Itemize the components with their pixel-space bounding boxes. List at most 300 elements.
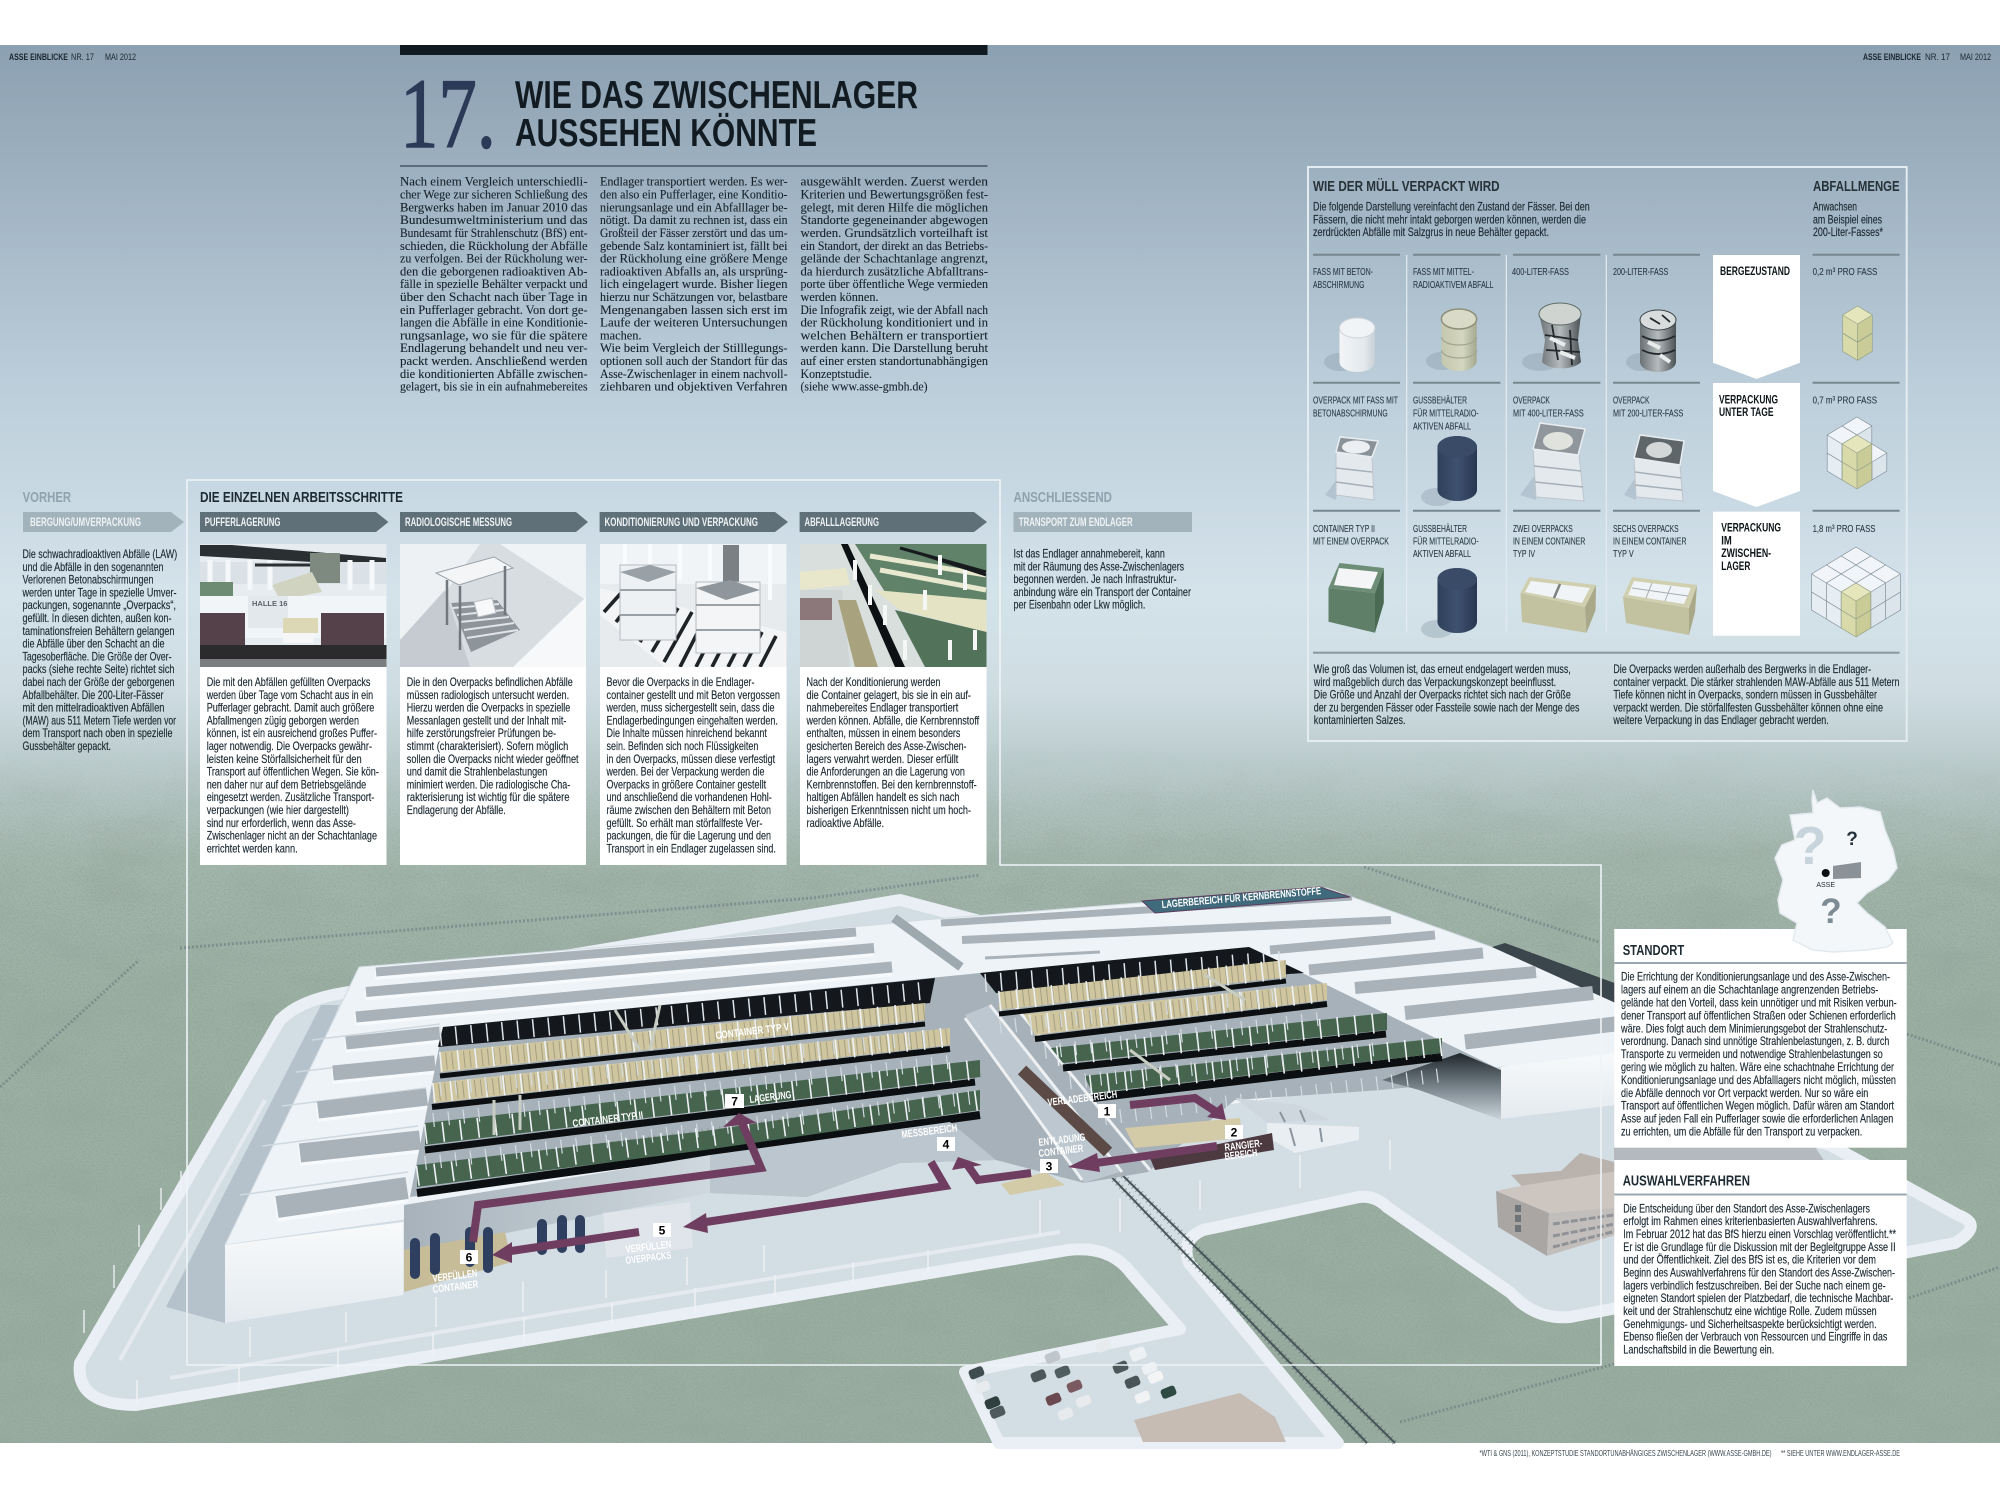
row labels verpackung unter tage: OVERPACK [1613, 396, 1650, 406]
icon: overpack with 200 litre drum [1624, 435, 1684, 501]
row labels bergezustand: 200-LITER-FASS [1613, 267, 1669, 278]
card text: Transport in ein Endlager zugelassen sind. [606, 842, 776, 855]
card text: Die Inhalte müssen hinreichend bekannt [606, 727, 768, 740]
area labels: LAGERUNG [749, 1089, 792, 1106]
grey strip left of building [166, 1005, 339, 1323]
icon: overpack with 400 litre drum [1520, 423, 1585, 501]
card text: Hierzu werden die Overpacks in spezielle [407, 702, 570, 715]
intro column 2: Wie beim Vergleich der Stilllegungs- [600, 341, 788, 355]
card text: Endlagerung der Abfälle. [407, 804, 506, 817]
intro text: Die folgende Darstellung vereinfacht den Zustand der Fässer. Bei den [1313, 200, 1590, 214]
card text: sind nur erforderlich, wenn das Asse- [207, 817, 356, 830]
front left wall [225, 1222, 404, 1323]
area labels: BEREICH [1224, 1147, 1258, 1163]
photo: hall with crane [200, 544, 386, 667]
train in tunnel [1022, 1070, 1108, 1152]
vorher text: mit den mittelradioaktiven Abfällen [22, 702, 164, 715]
chevron bergezustand: BERGEZUSTAND [1720, 266, 1790, 278]
heading: WIE DER MÜLL VERPACKT WIRD [1313, 178, 1500, 195]
auswahlverfahren text: erfolgt im Rahmen eines kriterienbasierten Auswahlverfahrens. [1623, 1215, 1878, 1228]
card text [407, 676, 579, 817]
card text: Messanlagen gestellt und der Inhalt mit- [407, 714, 566, 727]
floor slabs [417, 981, 1442, 1193]
intro text [400, 175, 989, 394]
footnotes: *WTI & GNS (2011), KONZEPTSTUDIE STANDORTUNABHÄNGIGES ZWISCHENLAGER (WWW.ASSE-GMBH.DE) [1480, 1448, 1772, 1458]
row labels bergezustand: 0,2 m³ PRO FASS [1813, 267, 1878, 278]
beige container rows [433, 960, 1327, 1103]
row labels zwischenlager: GUSSBEHÄLTER [1413, 523, 1467, 535]
intro column 3: (siehe www.asse-gmbh.de) [800, 380, 928, 394]
card text: bisherigen Erkenntnissen nicht um hoch- [806, 804, 971, 817]
number badges: 7 [731, 1094, 738, 1108]
row labels zwischenlager: IN EINEM CONTAINER [1613, 536, 1686, 548]
row labels zwischenlager [1313, 523, 1876, 560]
intro column 2: nierungsanlage und ein Abfalllager be- [600, 200, 788, 214]
auswahlverfahren text: Die Entscheidung über den Standort des Asse-Zwischenlagers [1623, 1202, 1870, 1215]
card text: eingesetzt werden. Zusätzliche Transport- [207, 791, 374, 804]
card text: können, ist ein ausreichend großes Puffer- [207, 727, 377, 740]
nuclear fuel storage tag [1142, 884, 1350, 913]
small facility [1833, 862, 1861, 879]
chevron verpackung unter tage [1713, 383, 1800, 507]
row labels verpackung unter tage: 0,7 m³ PRO FASS [1813, 396, 1877, 406]
vorher text: dabei nach der Größe der geborgenen [22, 676, 174, 689]
title: AUSSEHEN KÖNNTE [515, 112, 817, 155]
building strip between panels [1614, 1147, 1825, 1162]
card text: hilfe zerstörungsfreier Prüfungen be- [407, 727, 556, 740]
card: konditionierung und verpackung [600, 544, 786, 865]
area labels [432, 1021, 1263, 1296]
anschliessend text [1014, 548, 1191, 612]
intro column 2: der Rückholung eine größere Menge [600, 252, 788, 266]
intro column 1: gelagert, bis sie in ein aufnahmebereites [400, 380, 588, 394]
intro column 2: den also ein Pufferlager, eine Konditio- [600, 188, 788, 202]
standort text: verordnung. Danach sind unnötige Strahlenbelastungen, z. B. durch [1621, 1035, 1889, 1048]
intro column 3: auf einer ersten standortunabhängigen [800, 354, 988, 368]
row labels verpackung unter tage [1313, 394, 1877, 432]
card text: werden. Bei der Verpackung werden die [606, 766, 764, 779]
vorher text: die Abfälle über den Schacht an die [22, 638, 164, 651]
card text: errichtet werden kann. [207, 842, 298, 855]
arrow abfalllagerung [800, 512, 987, 532]
office building [1496, 1153, 1625, 1256]
card text: die Container gelagert, bis sie in ein auf- [806, 689, 971, 702]
icon: cast iron container [1421, 436, 1477, 506]
card text: Nach der Konditionierung werden [806, 676, 940, 689]
brown containers [1150, 1133, 1274, 1170]
cutaway interior [410, 947, 1497, 1197]
footer text left: kontaminierten Salzes. [1314, 714, 1406, 727]
row labels zwischenlager: TYP IV [1513, 549, 1535, 560]
icon: container type V [1623, 577, 1697, 635]
lamp posts [84, 1140, 1390, 1405]
box verpackung im zwischenlager: IM [1721, 535, 1732, 547]
intro column 2: Mengenangaben lassen sich erst im [600, 303, 788, 317]
card text: gesicherten Bereich des Asse-Zwischen- [806, 740, 967, 753]
map outline [1775, 790, 1897, 952]
arrow konditionierung und verpackung [600, 512, 788, 532]
row labels zwischenlager: TYP V [1613, 549, 1634, 560]
card text: und damit die Strahlenbelastungen [407, 766, 547, 779]
card: pufferlagerung [200, 544, 386, 865]
panel: wie der müll verpackt wird [1308, 167, 1907, 741]
vorher text: dem Transport nach oben in spezielle [22, 727, 172, 740]
auswahlverfahren text: Ebenso fließen der Verbrauch von Ressourcen und Eingriffe in das [1623, 1331, 1887, 1344]
row labels verpackung unter tage: GUSSBEHÄLTER [1413, 394, 1467, 406]
footer text right: container verpackt. Die stärker strahlenden MAW-Abfälle aus 511 Metern [1613, 676, 1899, 689]
row labels bergezustand: FASS MIT MITTEL- [1413, 267, 1474, 278]
card text: müssen radiologisch untersucht werden. [407, 689, 569, 702]
footer text right [1613, 663, 1899, 727]
chevron verpackung unter tage: VERPACKUNG [1719, 394, 1778, 406]
intro column 2: Laufe der weiteren Untersuchungen [600, 316, 788, 330]
running header left [9, 52, 136, 63]
card text: Abfallmengen zügig geborgen werden [207, 714, 359, 727]
anschliessend text: anbindung wäre ein Transport der Container [1014, 586, 1191, 599]
hall lower wall [404, 1155, 710, 1253]
number badges: 3 [1046, 1160, 1053, 1174]
heading anschliessend: ANSCHLIESSEND [1014, 489, 1112, 506]
area labels: CONTAINER [432, 1278, 479, 1296]
intro text: Fässern, die nicht mehr intakt geborgen werden können, werden die [1313, 213, 1586, 226]
card text: sollen die Overpacks nicht wieder geöffnet [407, 753, 579, 766]
row labels verpackung unter tage: MIT 200-LITER-FASS [1613, 408, 1684, 420]
running header left: MAI 2012 [105, 52, 136, 63]
intro column 2: hierzu nur Schätzungen vor, belastbare [600, 290, 788, 304]
intro column 1: den die geborgenen radioaktiven Ab- [400, 264, 588, 278]
corridor walls [965, 1000, 1150, 1180]
standort text: dener Transport auf öffentlichen Straßen oder Schienen erforderlich [1621, 1009, 1896, 1022]
icon: green container type II [1328, 563, 1384, 633]
photo: hall with crane: HALLE 16 [252, 599, 287, 608]
intro column 2: radioaktiven Abfalls an, als ursprüng- [600, 264, 788, 278]
main roof [225, 888, 1640, 1245]
vorher text: und die Abfälle in den sogenannten [22, 561, 164, 574]
standort text: Konditionierungsanlage und des Abfalllagers nicht möglich, müssten [1621, 1074, 1896, 1087]
vorher text: Verlorenen Betonabschirmungen [22, 574, 154, 587]
card text: radioaktive Abfälle. [806, 817, 884, 830]
intro column 2: Großteil der Fässer zerstört und das um- [600, 226, 788, 240]
intro column 3: werden kann. Die Darstellung beruht [800, 341, 989, 355]
box verpackung im zwischenlager [1713, 512, 1800, 636]
row labels zwischenlager: ZWEI OVERPACKS [1513, 524, 1573, 535]
arrow radiologische messung [400, 512, 588, 532]
panel background [1614, 1160, 1907, 1366]
arrow 6 to 7 [473, 1123, 761, 1242]
running header right: ASSE EINBLICKE [1863, 52, 1921, 63]
question mark medium: ? [1820, 892, 1842, 931]
arrow bergung [23, 512, 184, 532]
anschliessend text: begonnen werden. Je nach Infrastruktur- [1014, 573, 1177, 586]
vorher text: Tagesoberfläche. Die Größe der Over- [22, 650, 172, 663]
intro column 2: nötigt. Da damit zu rechnen ist, dass ein [600, 213, 788, 227]
panel: auswahlverfahren [1614, 1160, 1907, 1366]
area labels: ENTLADUNG [1038, 1131, 1086, 1149]
dark hall at right end [1382, 1053, 1501, 1120]
intro column 2: ziehbaren und objektiven Verfahren [600, 380, 788, 394]
number badges: 2 [1231, 1126, 1238, 1140]
area labels: MESSBEREICH [901, 1122, 958, 1141]
unloaded containers [1001, 1172, 1065, 1195]
question mark small: ? [1846, 829, 1858, 850]
anschliessend text: mit der Räumung des Asse-Zwischenlagers [1014, 560, 1184, 573]
intro column 3: ein Standort, der direkt an das Betriebs- [800, 239, 988, 253]
building at bottom edge [1134, 1393, 1286, 1442]
arrow radiologische messung: RADIOLOGISCHE MESSUNG [405, 517, 512, 529]
text box [800, 667, 986, 865]
panel background [1614, 929, 1907, 1148]
silos [415, 1220, 580, 1274]
card text: werden, muss sichergestellt sein, dass die [606, 702, 774, 715]
container seams and white posts [417, 969, 1442, 1176]
arrow 4 to 5 [706, 1162, 945, 1222]
row labels zwischenlager: CONTAINER TYP II [1313, 524, 1375, 535]
intro column 3: da hierdurch zusätzliche Abfalltrans- [800, 264, 988, 278]
intro column 3: ausgewählt werden. Zuerst werden [800, 175, 988, 189]
number badges: 4 [943, 1138, 950, 1152]
box verpackung im zwischenlager: ZWISCHEN- [1721, 548, 1771, 560]
intro column 3: Konzeptstudie. [800, 367, 872, 381]
footer text left: Wie groß das Volumen ist, das erneut endgelagert werden muss, [1314, 663, 1571, 676]
card: abfalllagerung [800, 544, 986, 865]
footer text left [1313, 663, 1580, 727]
vorher text: packungen, sogenannte „Overpacks“, [22, 599, 176, 612]
arrow 5 to 6 [511, 1232, 639, 1251]
intro column 1: rungsanlage, wo sie für die spätere [400, 328, 588, 342]
intro column 3 [800, 175, 989, 394]
railway tracks [1100, 1165, 1395, 1443]
running header left: ASSE EINBLICKE [9, 52, 68, 63]
icon: overpack with concrete drum [1325, 437, 1378, 500]
intro column 3: Standorte gegeneinander abgewogen [800, 213, 988, 227]
auswahlverfahren text: Genehmigungs- und Sicherheitsaspekte berücksichtigt werden. [1623, 1318, 1877, 1331]
intro column 2: lich eingelagert wurde. Bisher liegen [600, 277, 788, 291]
card text: und anschließend die vorhandenen Hohl- [606, 791, 772, 804]
standort text: Transport auf öffentlichen Wegen möglich. Dafür wären am Standort [1621, 1100, 1895, 1113]
running header left: NR. 17 [71, 52, 94, 63]
intro text: zerdrückten Abfälle mit Salzgrus in neue Behälter gepackt. [1313, 226, 1549, 239]
green container rows [417, 1013, 1442, 1187]
arrow bergung: BERGUNG/UMVERPACKUNG [30, 517, 141, 529]
heading vorher: VORHER [23, 489, 71, 506]
intro column 1: zu verfolgen. Bei der Rückholung wer- [400, 252, 588, 266]
text box [200, 667, 386, 865]
icon: cast iron container row 3 [1421, 568, 1477, 638]
card text: lagers verwahrt werden. Dieser erfüllt [806, 753, 959, 766]
row labels bergezustand [1313, 267, 1878, 291]
photo: measuring station [400, 544, 586, 667]
panel: vorher [22, 489, 184, 753]
photo: storage rows [800, 544, 986, 667]
auswahlverfahren text: und der Öffentlichkeit. Ziel des BfS ist es, die Kriterien vor dem [1623, 1254, 1876, 1267]
heading abfallmenge: ABFALLMENGE [1813, 178, 1900, 195]
heading die einzelnen arbeitsschritte: DIE EINZELNEN ARBEITSSCHRITTE [200, 489, 403, 506]
question mark large: ? [1794, 816, 1826, 876]
card text: räume zwischen den Behältern mit Beton [606, 804, 771, 817]
row labels bergezustand: FASS MIT BETON- [1313, 267, 1373, 278]
row labels verpackung unter tage: OVERPACK [1513, 396, 1550, 406]
box verpackung im zwischenlager: VERPACKUNG [1721, 522, 1781, 534]
card text: in den Overpacks, müssen diese verfestigt [606, 753, 776, 766]
beige containers in loading area [1125, 1118, 1242, 1148]
abfallmenge text: am Beispiel eines [1813, 213, 1882, 226]
card text: packungen, die für die Lagerung und den [606, 830, 771, 843]
roof skylights [276, 897, 1640, 1210]
vorher text: packs (siehe rechte Seite) richtet sich [22, 663, 174, 676]
anschliessend text: per Eisenbahn oder Lkw möglich. [1014, 599, 1145, 612]
card text: die Anforderungen an die Lagerung von [806, 766, 965, 779]
card text: Endlagerbedingungen eingehalten werden. [606, 714, 778, 727]
row labels zwischenlager: FÜR MITTELRADIO- [1413, 536, 1479, 548]
title: WIE DAS ZWISCHENLAGER [515, 74, 918, 117]
intro column 1: über den Schacht nach über Tage in [400, 290, 588, 304]
auswahlverfahren text: Er ist die Grundlage für die Diskussion mit der Begleitgruppe Asse II [1623, 1241, 1896, 1254]
intro column 3: gelände der Schachtanlage angrenzt, [800, 252, 988, 266]
intro column 1: fälle in spezielle Behälter verpackt und [400, 277, 588, 291]
row labels bergezustand: ABSCHIRMUNG [1313, 280, 1365, 291]
filling hall overpacks [603, 1202, 693, 1258]
arrow abfalllagerung: ABFALLLAGERUNG [804, 517, 879, 529]
intro column 2: Endlager transportiert werden. Es wer- [600, 175, 788, 189]
number badges: 1 [1104, 1104, 1111, 1118]
auswahlverfahren text: Im Februar 2012 hat das BfS hierzu einen Vorschlag veröffentlicht.** [1623, 1228, 1896, 1241]
chapter number: 17. [400, 58, 496, 169]
number badges: 6 [466, 1250, 473, 1264]
text box [600, 667, 786, 865]
germany map [1775, 790, 1897, 952]
intro column 2: Asse-Zwischenlager in einem nachvoll- [600, 367, 788, 381]
bottom rule [1313, 652, 1900, 654]
asse location dot [1822, 869, 1830, 877]
arrow heads [492, 1103, 1226, 1263]
icon: concrete drum [1324, 318, 1375, 372]
vorher text: werden unter Tage in spezielle Umver- [22, 586, 177, 599]
intro column 2: gebende Salz kontaminiert ist, fällt bei [600, 239, 788, 253]
bar transport [1014, 512, 1192, 532]
chevron bergezustand [1713, 255, 1800, 379]
icon: damaged 400 litre drum [1522, 303, 1581, 371]
box verpackung im zwischenlager: LAGER [1721, 561, 1751, 573]
top dark storage row [438, 978, 935, 1047]
row labels bergezustand: 400-LITER-FASS [1512, 267, 1569, 278]
standort text: Transporte zu vermeiden und notwendige Strahlenbelastungen so [1621, 1048, 1883, 1061]
icon: container type IV [1520, 577, 1596, 633]
intro column 1: schieden, die Rückholung der Abfälle [400, 239, 588, 253]
intro column 1: Bundesamt für Strahlenschutz (BfS) ent- [400, 226, 588, 240]
area labels: VERFÜLLEN [625, 1237, 672, 1256]
icon: volume cubes 1.8 [1812, 547, 1900, 637]
intro column 3: werden können. [800, 290, 878, 304]
row labels bergezustand: RADIOAKTIVEM ABFALL [1413, 280, 1494, 291]
auswahlverfahren text: Beginn des Auswahlverfahrens für den Standort des Asse-Zwischen- [1623, 1266, 1895, 1280]
intro column 1: Nach einem Vergleich unterschiedli- [400, 175, 588, 189]
standort text [1620, 971, 1897, 1138]
icon: volume cube 0.2 [1843, 306, 1872, 360]
process arrows [473, 1098, 1218, 1251]
card text: werden über Tage vom Schacht aus in ein [206, 689, 373, 702]
card text: enthalten, müssen in einem besonders [806, 727, 961, 740]
card text: Bevor die Overpacks in die Endlager- [606, 676, 755, 689]
intro column 3: Die Infografik zeigt, wie der Abfall nach [800, 303, 989, 317]
card text: stimmt (charakterisiert). Sofern möglich [407, 740, 568, 753]
footer text right: weitere Verpackung in das Endlager gebracht werden. [1613, 714, 1829, 727]
running header right: MAI 2012 [1960, 52, 1991, 63]
wall segments along measuring area [710, 1122, 996, 1197]
vorher text: gefüllt. In diesen dichten, außen kon- [22, 612, 172, 625]
standort text: wäre. Dies folgt auch dem Minimierungsgebot der Strahlenschutz- [1620, 1022, 1887, 1035]
footer text left: wird maßgeblich durch das Verpackungskonzept beeinflusst. [1313, 676, 1556, 689]
auswahlverfahren text: keit und der Strahlenschutz eine wichtige Rolle. Zudem müssen [1623, 1305, 1877, 1318]
footer text right: Die Overpacks werden außerhalb des Bergwerks in die Endlager- [1613, 663, 1871, 676]
card text: lager notwendig. Die Overpacks gewähr- [207, 740, 372, 753]
card text: gefüllt. So erhält man störfallfeste Ver- [606, 817, 763, 830]
divider [1614, 962, 1907, 964]
intro column 1 [400, 175, 588, 394]
arrow konditionierung und verpackung: KONDITIONIERUNG UND VERPACKUNG [604, 517, 758, 529]
top black bar [400, 45, 988, 55]
card text: Pufferlager gebracht. Damit auch größere [207, 702, 374, 715]
intro column 1: die konditionierten Abfälle zwischen- [400, 367, 588, 381]
divider [1614, 1194, 1907, 1196]
row labels verpackung unter tage: BETONABSCHIRMUNG [1313, 408, 1388, 420]
heading auswahlverfahren: AUSWAHLVERFAHREN [1623, 1173, 1750, 1190]
row labels zwischenlager: 1,8 m³ PRO FASS [1813, 524, 1876, 535]
card text [206, 676, 379, 855]
auswahlverfahren text: lagers verbindlich festzuschreiben. Bei der Suche nach einem ge- [1623, 1279, 1886, 1292]
row labels zwischenlager: MIT EINEM OVERPACK [1313, 536, 1389, 548]
footer text left: der zu bergenden Fässer oder Fassteile sowie nach der Menge des [1314, 701, 1580, 714]
title rule [400, 165, 988, 167]
abfallmenge text [1813, 200, 1883, 239]
text box [400, 667, 586, 865]
filling area beige [404, 1232, 512, 1292]
bar transport: TRANSPORT ZUM ENDLAGER [1019, 517, 1133, 529]
icon: intermediate waste drum [1426, 309, 1477, 371]
card text: werden können. Abfälle, die Kernbrennstoff [806, 714, 980, 727]
auswahlverfahren text [1623, 1202, 1896, 1356]
vorher text: Gussbehälter gepackt. [22, 740, 111, 753]
area labels: CONTAINER TYP V [715, 1021, 790, 1042]
vorher text [22, 548, 177, 753]
number badges: 5 [659, 1224, 666, 1238]
standort text: gelände hat den Vorteil, dass kein unnötiger und mit Risiken verbun- [1621, 996, 1897, 1010]
row labels zwischenlager: IN EINEM CONTAINER [1513, 536, 1585, 548]
row labels verpackung unter tage: FÜR MITTELRADIO- [1413, 408, 1479, 420]
intro column 3: welchen Behältern er transportiert [800, 328, 989, 342]
icon: volume cubes 0.7 [1827, 417, 1887, 489]
running header right: NR. 17 [1925, 52, 1950, 63]
abfallmenge text: Anwachsen [1813, 200, 1857, 214]
standort text: gering wie möglich zu halten. Wäre eine schachtnahe Errichtung der [1621, 1061, 1894, 1074]
area labels: CONTAINER TYP II [572, 1109, 644, 1130]
area labels: VERFÜLLEN [432, 1267, 478, 1285]
auswahlverfahren text: eigneten Standort spielen der Platzbedarf, die technische Machbar- [1623, 1292, 1893, 1305]
photo: overpacks on conveyor [600, 544, 786, 667]
card text: nen daher nur auf dem Betriebsgelände [207, 778, 366, 791]
footer text right: verpackt werden. Die störfallfesten Gussbehälter können ohne eine [1613, 701, 1883, 714]
intro column 1: packt werden. Anschließend werden [400, 354, 588, 368]
card text: Die in den Overpacks befindlichen Abfälle [407, 676, 573, 689]
row labels zwischenlager: SECHS OVERPACKS [1613, 524, 1679, 535]
roof section lines [240, 1024, 440, 1195]
card text: Kernbrennstoffen. Bei den kernbrennstoff- [806, 778, 977, 791]
intro column 3: werden. Grundsätzlich vorteilhaft ist [800, 226, 989, 240]
intro column 3: porte über öffentliche Wege vermieden [800, 277, 988, 291]
area labels: CONTAINER [1038, 1143, 1084, 1160]
card text: rakterisierung ist wichtig für die spätere [407, 791, 570, 804]
step arrows [200, 512, 987, 532]
standort text: zu errichten, um die Abfälle für den Transport zu verpacken. [1621, 1126, 1862, 1138]
